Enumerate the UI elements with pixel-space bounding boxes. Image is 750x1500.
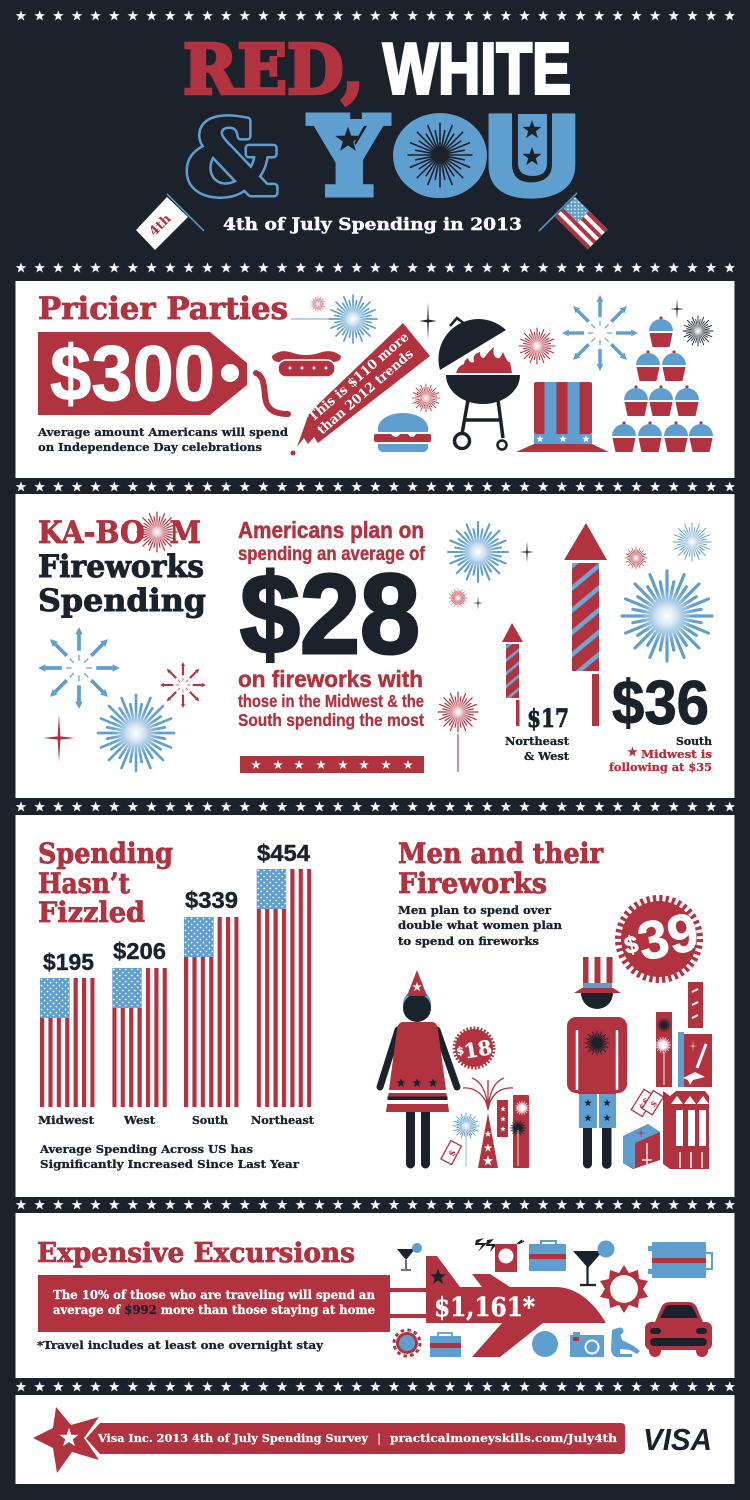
bar: West xyxy=(112,968,167,1107)
category labels xyxy=(38,1113,315,1127)
icon: small rocket xyxy=(502,623,523,726)
value labels xyxy=(43,840,310,975)
icon: Uncle Sam hat xyxy=(516,382,609,452)
caption xyxy=(37,425,288,454)
woman's fireworks: $ xyxy=(447,1148,459,1159)
label: $17: $17 xyxy=(527,704,569,733)
title block xyxy=(136,30,608,250)
badge: $18: $ xyxy=(455,1044,465,1058)
central message: on fireworks with xyxy=(238,666,423,692)
firework xyxy=(519,328,555,364)
big number: $28: $28 xyxy=(240,551,420,677)
value labels: $195 xyxy=(43,949,94,975)
central message: those in the Midwest & the xyxy=(238,691,424,711)
panel: spending and men xyxy=(16,815,734,1197)
central message xyxy=(238,517,426,730)
heading: Expensive Excursions xyxy=(37,1238,355,1269)
icon: sun xyxy=(600,1265,648,1313)
icon: large suitcase xyxy=(648,1242,712,1278)
heading: Fireworks Spending: Spending xyxy=(38,583,206,619)
title: letter U with stars: U xyxy=(482,90,582,222)
badge: $18 xyxy=(454,1028,494,1068)
label: $36: South xyxy=(676,734,713,748)
bar: Northeast xyxy=(257,869,311,1107)
chart caption: Average Spending Across US has xyxy=(39,1142,253,1156)
icon: car seat xyxy=(611,1328,640,1357)
heading: Men and their Fireworks: Fireworks xyxy=(398,867,547,900)
heading: Fireworks Spending xyxy=(38,549,206,619)
icon: hot dog xyxy=(272,351,341,377)
firework and sparkle xyxy=(670,298,713,346)
tag string xyxy=(256,373,288,414)
heading: Spending Hasn't Fizzled: Fizzled xyxy=(38,896,145,929)
men text: Men plan to spend over xyxy=(398,903,552,917)
central message: spending an average of xyxy=(238,544,426,565)
icon: sparkle xyxy=(419,302,437,340)
label: $36: $36 xyxy=(612,669,709,738)
label: $17 xyxy=(505,704,570,763)
icon: star logo xyxy=(33,1407,99,1473)
icon: red sparkle xyxy=(43,714,75,762)
woman's fireworks xyxy=(441,1078,529,1168)
heading: Spending Hasn't Fizzled: Hasn’t xyxy=(38,867,130,900)
bar: Midwest xyxy=(40,978,95,1107)
ribbon callout: This is $110 more xyxy=(306,330,412,425)
icon: car xyxy=(645,1302,712,1357)
icon: lightning and red box xyxy=(475,1238,524,1272)
caption: Average amount Americans will spend xyxy=(37,425,288,439)
banner: practicalmoneyskills.com/July4th xyxy=(390,1431,618,1445)
value labels: $206 xyxy=(113,938,166,964)
badge: $39: 39 xyxy=(633,901,704,973)
heading: KA-BOOM: KA-BOOM xyxy=(38,515,201,551)
badge: $39: $ xyxy=(622,931,641,960)
label: $36: following at $35 xyxy=(609,760,712,774)
central message: Americans plan on xyxy=(238,517,424,543)
callout box xyxy=(38,1275,390,1332)
heading: Men and their Fireworks: Men and their xyxy=(398,837,604,870)
category labels: Midwest xyxy=(38,1113,95,1127)
men text: double what women plan xyxy=(398,918,563,932)
label: $17: & West xyxy=(524,749,570,763)
chart caption: Significantly Increased Since Last Year xyxy=(40,1157,300,1171)
Visa logo: VISA xyxy=(643,1422,712,1457)
star bar xyxy=(240,756,424,773)
icon: American flag xyxy=(539,193,608,249)
men text: to spend on fireworks xyxy=(398,934,539,948)
title: letter O with burst: O xyxy=(393,91,487,222)
category labels: South xyxy=(192,1113,229,1127)
heading: Fireworks Spending: Fireworks xyxy=(38,549,204,585)
icon: cupcake pyramid xyxy=(612,316,713,452)
panel: Pricier Parties xyxy=(16,281,734,478)
icon: airplane with value xyxy=(426,1256,606,1357)
panel: KA-BOOM fireworks spending xyxy=(16,494,734,798)
title: WHITE: WHITE xyxy=(383,30,571,110)
icon: suitcase xyxy=(529,1241,566,1271)
icon: large martini xyxy=(573,1240,614,1285)
icon: small sun xyxy=(394,1330,420,1356)
price tag: $300 xyxy=(50,329,215,417)
panel: Expensive Excursions xyxy=(16,1213,734,1378)
title: ampersand: & xyxy=(186,99,276,217)
man's fireworks: $$ xyxy=(638,1096,653,1112)
man's fireworks: $ xyxy=(648,1099,659,1109)
banner: Visa Inc. 2013 4th of July Spending Survey xyxy=(97,1431,368,1445)
fireworks group xyxy=(438,522,712,772)
central message: South spending the most xyxy=(238,710,424,730)
men text xyxy=(398,903,563,948)
title: RED,: RED, xyxy=(183,30,364,110)
ribbon callout xyxy=(290,323,430,456)
banner xyxy=(86,1423,625,1454)
icon: camera xyxy=(570,1332,604,1357)
firework xyxy=(98,695,174,771)
value labels: $339 xyxy=(185,887,238,913)
category labels: Northeast xyxy=(251,1113,315,1127)
callout box: The 10% of those who are traveling will spend an xyxy=(53,1288,375,1302)
caption: on Independence Day celebrations xyxy=(38,440,262,454)
firework xyxy=(412,384,440,412)
chart caption xyxy=(39,1142,300,1171)
icon: blue circle xyxy=(532,1331,558,1357)
badge: $18: 18 xyxy=(462,1035,494,1064)
bar: South xyxy=(184,917,239,1107)
icon: big rocket xyxy=(564,523,607,726)
heading: Men and their Fireworks xyxy=(398,837,604,900)
icon: grill xyxy=(438,318,520,450)
man's fireworks xyxy=(623,982,712,1169)
banner: | xyxy=(377,1431,381,1445)
figure: man xyxy=(567,957,627,1169)
icon: 4th flag: 4th xyxy=(147,211,175,239)
arrow fireworks xyxy=(38,627,206,709)
footnote: *Travel includes at least one overnight stay xyxy=(37,1338,323,1352)
ribbon callout: than 2012 trends xyxy=(315,347,417,438)
category labels: West xyxy=(123,1113,156,1127)
heading: Spending Hasn't Fizzled xyxy=(38,837,173,929)
panel: footer xyxy=(16,1395,734,1484)
figure: woman xyxy=(380,970,457,1168)
subtitle: 4th of July Spending in 2013 xyxy=(223,215,522,235)
blue line and fireworks xyxy=(291,295,377,343)
arrow firework xyxy=(562,295,638,371)
icon: airplane with value: $1,161* xyxy=(434,1293,535,1323)
value labels: $454 xyxy=(257,840,310,866)
callout box: average of $992 more than those staying at home xyxy=(53,1303,375,1317)
icon: small suitcase xyxy=(430,1333,461,1357)
connector bars xyxy=(380,1275,426,1332)
icon: burger xyxy=(374,413,431,452)
label: $36 xyxy=(609,669,713,774)
label: $17: Northeast xyxy=(505,734,570,748)
heading: Spending Hasn't Fizzled: Spending xyxy=(38,837,173,870)
title: letter Y with star: Y xyxy=(309,95,389,220)
icon: 4th flag xyxy=(136,194,204,250)
label: $36: Midwest is xyxy=(641,747,712,761)
icon: small martini xyxy=(397,1243,422,1270)
heading: Pricier Parties xyxy=(38,291,288,327)
title: ampersand: & xyxy=(186,99,276,217)
flag bar chart xyxy=(38,840,315,1127)
